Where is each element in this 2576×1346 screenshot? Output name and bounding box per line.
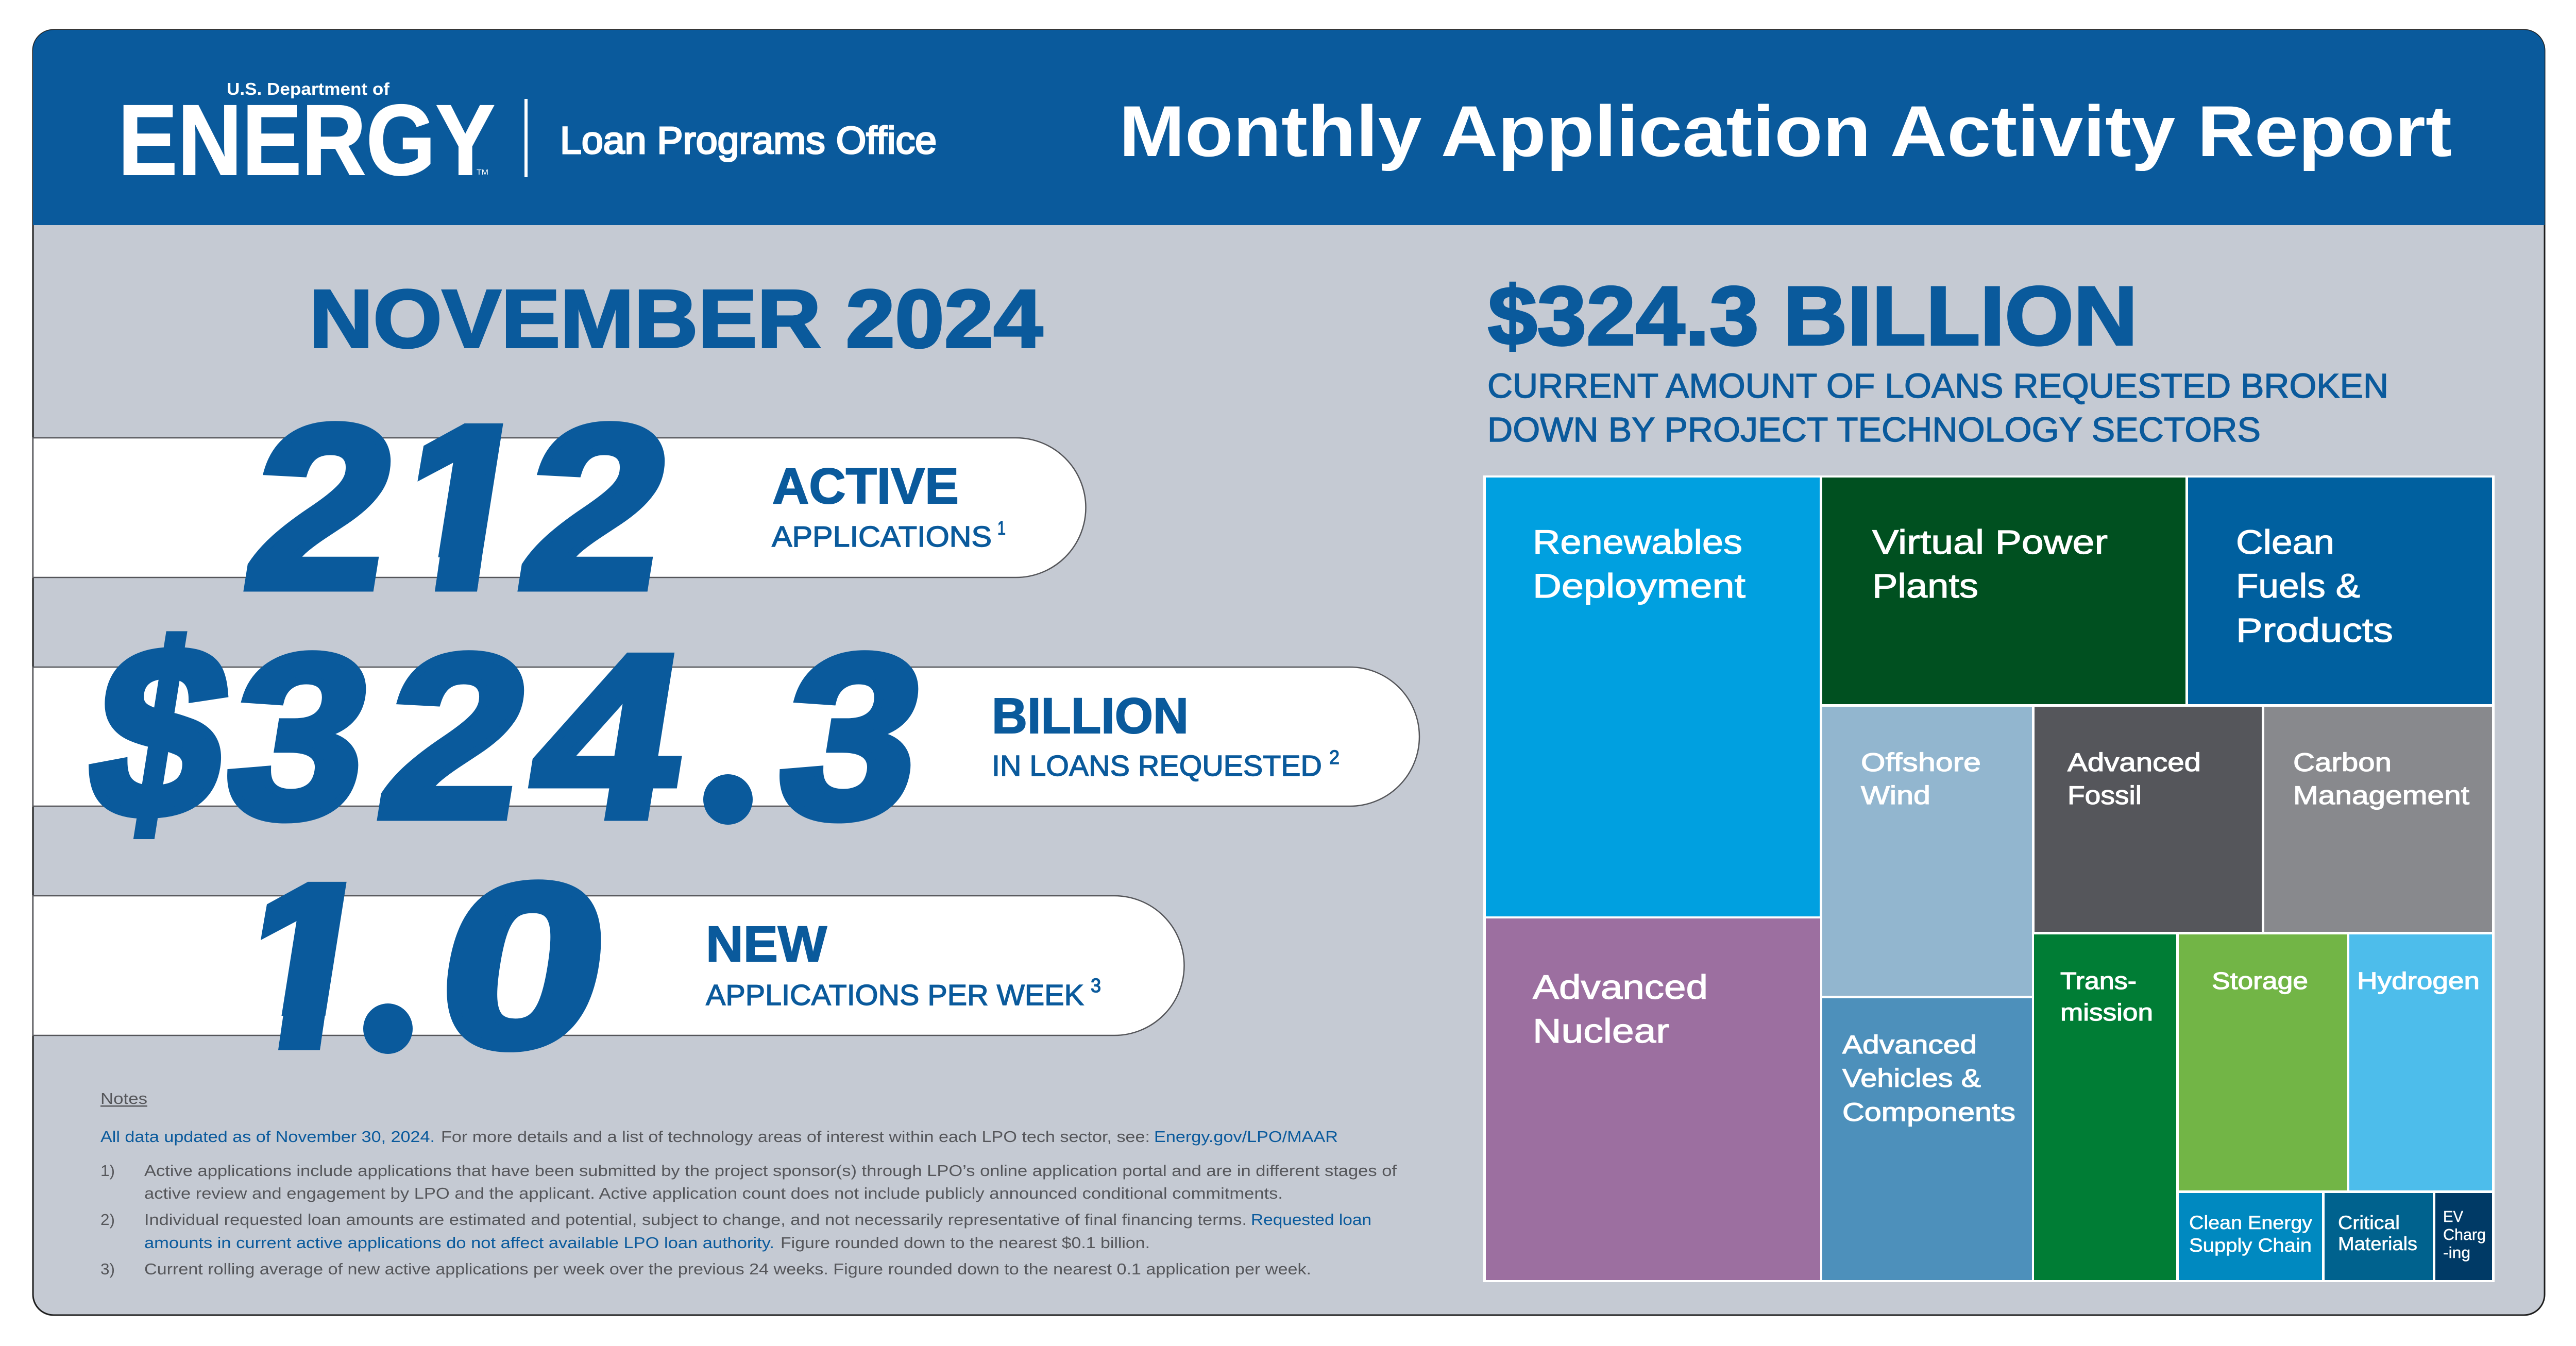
tile: Advanced Fossil: Fossil [2067,781,2142,810]
notes block: Current rolling average of new active applications per week over the previous 24 weeks. Figure rounded down to the nearest 0.1 application per week. [144,1260,1311,1278]
pill: new applications per week [33,836,1184,1095]
date heading: NOVEMBER 2024 [309,272,1043,365]
notes block: Requested loan [1251,1211,1371,1229]
tile: Clean Fuels and Products: Fuels & [2236,567,2360,605]
tile: Advanced Fossil [2035,707,2262,932]
tile: Carbon Management [2264,707,2492,932]
tile: Advanced Vehicles and Components: Components [1842,1098,2015,1127]
notes block: 1) [100,1162,115,1180]
pill: loans requested [33,597,1419,868]
tile: Advanced Nuclear: Advanced [1533,968,1708,1006]
notes block: Individual requested loan amounts are estimated and potential, subject to change, and not necessarily representative of final financing terms. [144,1211,1247,1229]
tile: EV Charging: Charg [2443,1225,2486,1243]
number: $324.3: 3 [764,607,940,866]
number: $324.3 [74,597,940,868]
tile: Carbon Management: Carbon [2293,748,2392,777]
tile: Advanced Nuclear [1486,918,1820,1280]
tile: Clean Energy Supply Chain: Supply Chain [2189,1235,2312,1256]
label: new applications per week: NEW [706,916,827,972]
notes block [100,1089,1397,1278]
number: 212: 2 [506,378,687,637]
label: active applications: 1 [997,518,1006,539]
treemap heading: DOWN BY PROJECT TECHNOLOGY SECTORS [1487,411,2261,449]
tile: Clean Fuels and Products: Products [2236,611,2393,649]
tile: Renewables Deployment [1486,478,1820,916]
office name: Loan Programs Office [560,119,937,162]
number: 212 [243,421,665,591]
title: Monthly Application Activity Report [1119,91,2452,172]
number: 1.0 [261,879,601,1054]
treemap heading [1487,269,2388,449]
tile: Renewables Deployment: Renewables [1533,523,1742,561]
logo: U.S. Department of Energy: TM [477,168,488,177]
tile: Carbon Management: Management [2293,781,2469,810]
tile: Storage: Storage [2212,967,2308,994]
label: active applications [772,458,1006,553]
tile: Critical Materials: Materials [2338,1233,2417,1254]
label: billion in loans requested: 2 [1329,747,1340,769]
tile: Storage [2179,934,2347,1190]
treemap [1483,475,2495,1282]
tile: Advanced Fossil: Advanced [2067,748,2201,777]
tile: Renewables Deployment: Deployment [1533,567,1745,605]
label: billion in loans requested: IN LOANS REQUESTED [992,749,1322,782]
number: $324.3: 4 [517,607,704,866]
notes block: amounts in current active applications do not affect available LPO loan authority. [144,1234,774,1252]
number: 1.0: 1 [215,836,396,1095]
label: new applications per week [706,916,1101,1012]
tile: Advanced Vehicles and Components: Vehicles & [1842,1064,1981,1093]
tile: Transmission [2034,934,2176,1280]
notes block: Figure rounded down to the nearest $0.1 billion. [781,1234,1150,1252]
notes block: Active applications include applications that have been submitted by the project sponsor(s) through LPO’s online application portal and are in different stages of [144,1162,1397,1180]
tile: Offshore Wind: Wind [1861,781,1930,810]
notes block: 3) [100,1260,115,1278]
tile: Offshore Wind: Offshore [1861,748,1981,777]
number: 1.0: . [355,836,420,1094]
label: billion in loans requested [992,688,1340,782]
label: billion in loans requested: BILLION [992,688,1189,744]
tile: EV Charging: -ing [2443,1243,2470,1262]
tile: Advanced Vehicles and Components: Advanced [1842,1030,1977,1059]
tile: Hydrogen [2349,934,2492,1190]
number: $324.3: . [696,606,760,865]
number: $324.3: 3 [212,607,388,866]
tile: Advanced Vehicles and Components [1822,998,2032,1280]
notes block: All data updated as of November 30, 2024. [100,1128,435,1146]
treemap heading: $324.3 BILLION [1488,269,2138,363]
pill: active applications [33,378,1086,637]
label: new applications per week: APPLICATIONS PER WEEK [706,979,1084,1012]
tile: Virtual Power Plants [1822,478,2185,704]
tile: Virtual Power Plants: Plants [1872,567,1978,605]
treemap heading: CURRENT AMOUNT OF LOANS REQUESTED BROKEN [1487,367,2388,405]
label: active applications: ACTIVE [772,458,959,514]
number: 212: 2 [232,378,413,637]
tile: EV Charging [2435,1193,2492,1280]
notes block: Energy.gov/LPO/MAAR [1154,1128,1338,1146]
label: active applications: APPLICATIONS [772,520,992,553]
tile: Clean Fuels and Products: Clean [2236,523,2334,561]
tile: Virtual Power Plants: Virtual Power [1872,523,2108,561]
label: new applications per week: 3 [1091,975,1101,997]
tile: Hydrogen: Hydrogen [2357,967,2480,994]
notes block: active review and engagement by LPO and the applicant. Active application count does not include publicly announced conditional commitments. [144,1184,1283,1202]
notes block: Notes [100,1089,147,1108]
logo: U.S. Department of Energy: U.S. Department of [227,79,390,98]
tile: Clean Energy Supply Chain: Clean Energy [2189,1212,2313,1233]
tile: Critical Materials: Critical [2338,1212,2400,1233]
number: $324.3: 2 [366,607,546,866]
number: 212: 1 [372,378,552,637]
notes block: For more details and a list of technology areas of interest within each LPO tech sector, see: [441,1128,1150,1146]
tile: Transmission: mission [2060,999,2153,1026]
header band [33,30,2545,225]
logo: U.S. Department of Energy: ENERGY [118,84,495,196]
tile: Clean Fuels and Products [2188,478,2492,704]
number: $324.3: $ [74,597,246,868]
notes block: 2) [100,1211,115,1229]
tile: Critical Materials [2325,1193,2433,1280]
tile: Transmission: Trans- [2060,967,2137,994]
tile: Offshore Wind [1822,707,2032,996]
tile: Advanced Nuclear: Nuclear [1533,1012,1669,1050]
tile: EV Charging: EV [2443,1207,2463,1225]
number: 1.0: 0 [422,836,626,1095]
tile: Clean Energy Supply Chain [2179,1193,2322,1280]
